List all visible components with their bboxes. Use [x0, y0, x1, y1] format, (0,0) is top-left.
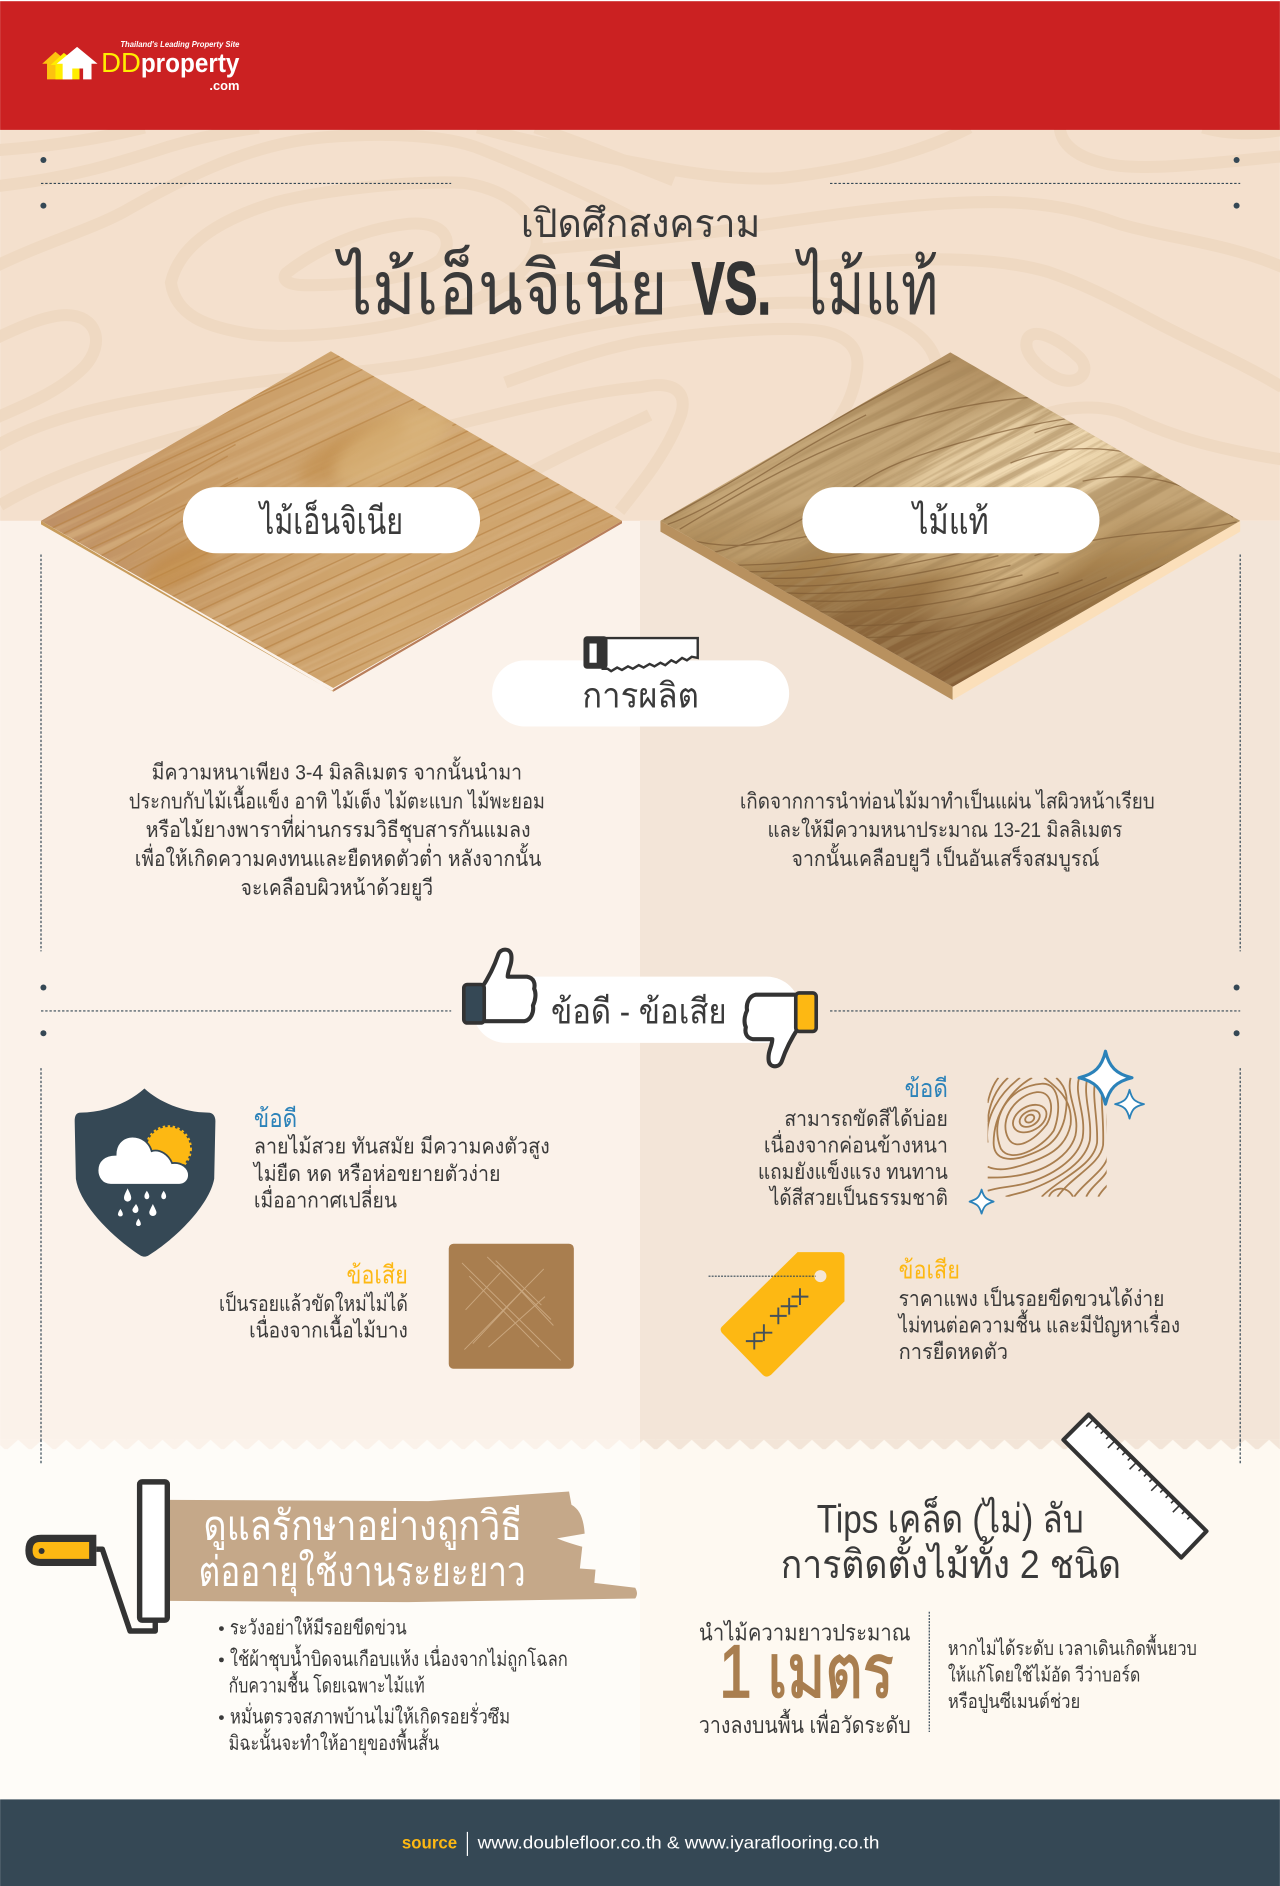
title: เปิดศึกสงคราม: [521, 202, 760, 246]
title: [335, 202, 938, 330]
list: care tips: ระวังอย่าให้มีรอยขีดข่วน: [230, 1616, 407, 1640]
text: solid cons: การยืดหดตัว: [899, 1339, 1008, 1364]
title: VS.: [692, 246, 771, 330]
text: solid cons: ข้อเสีย: [899, 1257, 960, 1285]
text: one metre tip: 1 เมตร: [719, 1629, 894, 1713]
text: solid pros: ได้สีสวยเป็นธรรมชาติ: [768, 1183, 948, 1210]
icon: wood grain with sparkles: [970, 1051, 1144, 1214]
title: ไม้แท้: [795, 246, 938, 330]
icon: thumbs up: [464, 950, 535, 1023]
text: solid cons: ไม่ทนต่อความชื้น และมีปัญหาเรื่อง: [897, 1310, 1180, 1338]
icon: thumbs down: [745, 993, 816, 1066]
logo: DDproperty: [42, 40, 240, 93]
text: one metre tip: นำไม้ความยาวประมาณ: [699, 1620, 911, 1646]
text: level fix tip: [948, 1634, 1197, 1714]
panel: lower left background: [0, 521, 640, 1449]
text: solid pros: แถมยังแข็งแรง ทนทาน: [758, 1157, 948, 1184]
text: engineered cons: [219, 1261, 408, 1343]
footer: [0, 1799, 1280, 1886]
text: engineered pros: ข้อดี: [254, 1105, 297, 1133]
text: level fix tip: หากไม่ได้ระดับ เวลาเดินเกิดพื้นยวบ: [948, 1634, 1197, 1660]
board: solid wood: [660, 352, 1240, 700]
text: one metre tip: [699, 1620, 911, 1738]
logo: DDproperty: Thailand's Leading Property Site: [120, 40, 240, 49]
text: level fix tip: ให้แก้โดยใช้ไม้อัด วีว่าบอร์ด: [948, 1664, 1140, 1687]
dotted rule with dots: top: [40, 157, 1240, 209]
text: engineered pros: ไม่ยืด หด หรือห่อขยายตัวง่าย: [252, 1161, 500, 1186]
pill label: engineered wood: [183, 487, 480, 553]
list: care tips: [219, 1616, 568, 1756]
list: care tips: มิฉะนั้นจะทำให้อายุของพื้นสั้น: [229, 1728, 439, 1756]
list: care tips: ใช้ผ้าชุบน้ำบิดจนเกือบแห้ง เนื่องจากไม่ถูกโฉลก: [230, 1644, 568, 1672]
text: solid cons: ราคาแพง เป็นรอยขีดขวนได้ง่าย: [899, 1284, 1164, 1311]
header band: [0, 1, 1280, 130]
icon: paint roller: [25, 1482, 167, 1631]
text: solid production: จากนั้นเคลือบยูวี เป็นอันเสร็จสมบูรณ์: [792, 843, 1099, 872]
section pill: production: [492, 660, 789, 726]
text: engineered cons: เนื่องจากเนื้อไม้บาง: [249, 1315, 408, 1343]
list: care tips: หมั่นตรวจสภาพบ้านไม่ให้เกิดรอยรั่วซึม: [230, 1703, 510, 1729]
dotted divider: [928, 1612, 930, 1732]
text: engineered pros: [252, 1105, 550, 1213]
text: solid pros: สามารถขัดสีได้บ่อย: [784, 1106, 948, 1131]
heading: tips: Tips เคล็ด (ไม่) ลับ: [817, 1495, 1084, 1541]
icon: scratched wood: [449, 1244, 574, 1369]
section pill: production: การผลิต: [582, 676, 699, 715]
panel: top background with wood contour lines: [0, 127, 1280, 521]
text: solid pros: เนื่องจากค่อนข้างหนา: [764, 1130, 948, 1157]
panel: lower tips background with zigzag edge: [0, 1440, 1280, 1800]
text: solid production: และให้มีความหนาประมาณ 13-21 มิลลิเมตร: [767, 817, 1122, 842]
text: solid pros: [758, 1075, 948, 1210]
text: engineered pros: เมื่ออากาศเปลี่ยน: [254, 1186, 397, 1213]
dotted vertical rules: [41, 554, 1240, 1465]
footer: www.doublefloor.co.th & www.iyaraflooring.co.th: [477, 1833, 879, 1853]
text: engineered production: [129, 756, 545, 901]
paint brush stroke banner: [170, 1491, 637, 1602]
text: engineered production: ประกบกับไม้เนื้อแข็ง อาทิ ไม้เต็ง ไม้ตะแบก ไม้พะยอม: [129, 785, 545, 813]
footer: source: [402, 1833, 457, 1853]
icon: price tag: [709, 1252, 844, 1377]
pill label: solid wood: [802, 487, 1099, 553]
dotted vertical rule ends over zigzag: [41, 1440, 1240, 1465]
paint brush stroke banner: ต่ออายุใช้งานระยะยาว: [199, 1548, 526, 1596]
section pill: pros and cons: ข้อดี - ข้อเสีย: [551, 993, 727, 1032]
text: solid cons: [897, 1257, 1180, 1364]
pill label: solid wood: ไม้แท้: [911, 500, 989, 542]
logo: DDproperty: DD: [101, 47, 141, 78]
text: engineered production: หรือไม้ยางพาราที่ผ่านกรรมวิธีชุบสารกันแมลง: [146, 815, 531, 843]
text: solid production: เกิดจากการนำท่อนไม้มาทำเป็นแผ่น ไสผิวหน้าเรียบ: [740, 786, 1155, 813]
text: engineered cons: เป็นรอยแล้วขัดใหม่ไม่ได้: [219, 1289, 408, 1316]
paint brush stroke banner: ดูแลรักษาอย่างถูกวิธี: [203, 1503, 522, 1551]
text: engineered production: จะเคลือบผิวหน้าด้วยยูวี: [241, 875, 433, 901]
text: engineered cons: ข้อเสีย: [347, 1261, 408, 1289]
heading: tips: การติดตั้งไม้ทั้ง 2 ชนิด: [781, 1536, 1121, 1587]
icon: ruler: [1063, 1414, 1207, 1558]
text: solid production: [740, 786, 1155, 872]
text: level fix tip: หรือปูนซีเมนต์ช่วย: [948, 1690, 1080, 1714]
icon: weather shield: [75, 1089, 215, 1257]
text: solid pros: ข้อดี: [905, 1075, 948, 1103]
heading: tips: [781, 1495, 1121, 1587]
board: engineered wood: [41, 351, 622, 692]
panel: lower right background: [640, 521, 1280, 1449]
logo: DDproperty: property: [141, 48, 240, 78]
text: engineered production: มีความหนาเพียง 3-4 มิลลิเมตร จากนั้นนำมา: [152, 756, 522, 784]
list: care tips: กับความชื้น โดยเฉพาะไม้แท้: [229, 1670, 425, 1697]
pill label: engineered wood: ไม้เอ็นจิเนีย: [258, 498, 403, 542]
text: engineered production: เพื่อให้เกิดความคงทนและยืดหดตัวต่ำ หลังจากนั้น: [135, 843, 542, 871]
text: engineered pros: ลายไม้สวย ทันสมัย มีความคงตัวสูง: [254, 1133, 550, 1159]
text: one metre tip: วางลงบนพื้น เพื่อวัดระดับ: [699, 1709, 911, 1738]
section pill: pros and cons: [473, 977, 800, 1043]
dotted rule with dots: pros and cons: [40, 984, 1240, 1036]
icon: saw: [583, 636, 698, 671]
logo: DDproperty: .com: [209, 79, 239, 93]
title: ไม้เอ็นจิเนีย: [335, 245, 668, 330]
